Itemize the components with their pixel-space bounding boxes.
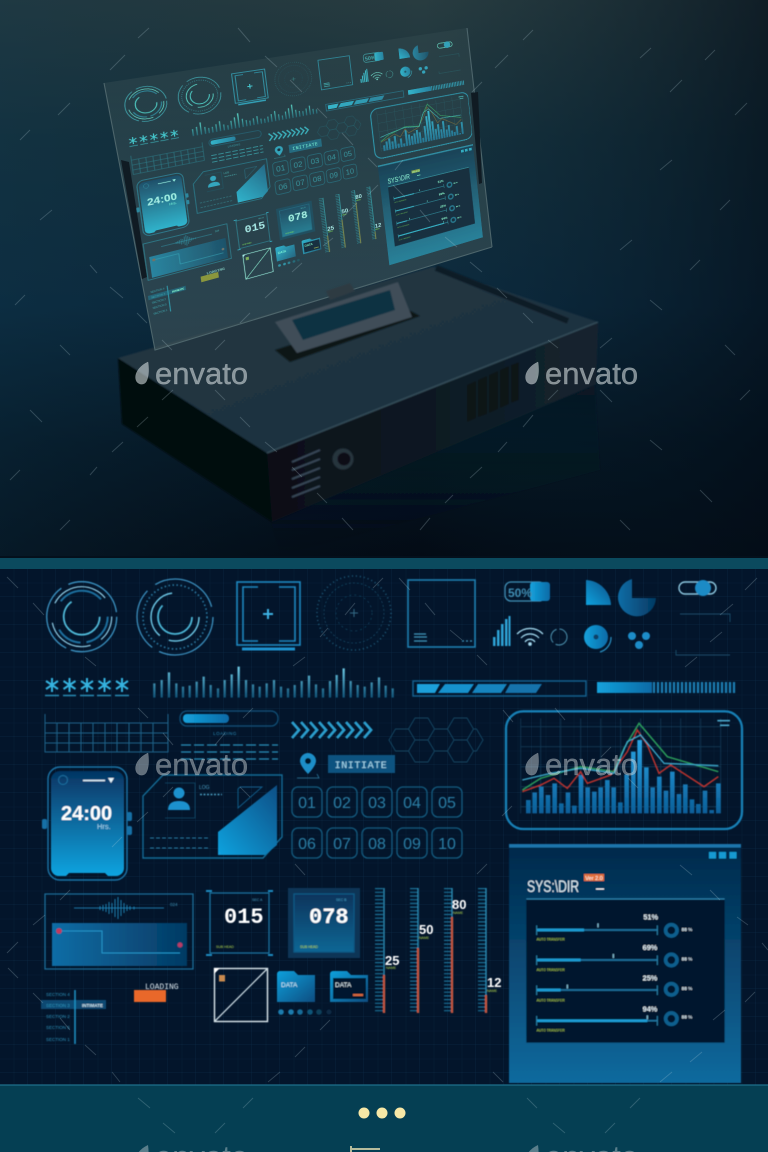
inner data board: 88 % — [682, 927, 693, 932]
counter 078: SEC B — [336, 898, 347, 902]
stand frame — [275, 282, 412, 353]
next icon fragment — [351, 1146, 380, 1152]
watermark middle left: envato — [155, 747, 248, 782]
waveform panel: 024 — [170, 902, 178, 907]
numbered keypad: 04 — [403, 795, 421, 812]
initiate button: INITIATE — [335, 761, 387, 772]
numbered keypad: 01 — [298, 795, 316, 812]
numbered keypad — [292, 787, 462, 858]
device: stand — [275, 282, 420, 362]
numbered keypad: 06 — [298, 836, 316, 853]
panel: interface sheet background — [0, 569, 768, 1085]
initiate button — [328, 755, 395, 773]
striped progress bar — [597, 682, 734, 693]
targeting square — [237, 582, 300, 649]
band: header strip of the interface sheet — [0, 558, 768, 569]
small ring — [551, 629, 567, 645]
inner data board: 69% — [643, 943, 658, 952]
vertical sliders: 25 — [385, 953, 399, 968]
counter 015: SEC A — [252, 898, 263, 902]
panel: footer band — [0, 1085, 768, 1152]
loading tag: LOADING — [145, 983, 179, 992]
inner data board: AUTO TRANSFER — [537, 1029, 565, 1033]
phone widget — [42, 767, 132, 880]
asterisk row — [45, 678, 129, 696]
honeycomb — [389, 718, 483, 762]
watermark middle right: envato — [545, 747, 638, 782]
counter 078: SUB HEAD — [300, 945, 318, 949]
loading pill: LOADING — [213, 731, 237, 736]
sysadir panel — [509, 844, 741, 1083]
numbered keypad: 08 — [368, 836, 386, 853]
radar dial — [317, 576, 391, 650]
disc icon — [584, 625, 611, 652]
inner data board: 25% — [643, 974, 658, 983]
inner data board: AUTO TRANSFER — [537, 938, 565, 942]
version tag: Ver 2.0 — [585, 876, 603, 882]
signal bars — [493, 616, 510, 646]
base left face — [118, 358, 272, 522]
numbered keypad: 05 — [438, 795, 456, 812]
waveform panel — [45, 894, 193, 969]
pie three quarter — [618, 579, 656, 616]
inner data board: 88 % — [682, 1014, 693, 1019]
device: base unit — [118, 267, 600, 556]
version tag — [584, 874, 604, 889]
gauge ring one — [47, 582, 117, 652]
inner data board: 88 % — [682, 957, 693, 962]
segmented progress bar — [413, 681, 586, 696]
equalizer wave — [154, 667, 393, 698]
section menu: SECTION 3 — [46, 1003, 70, 1008]
folder icon data — [277, 971, 315, 1002]
phone widget: 24:00 — [61, 803, 112, 825]
numbered keypad: 10 — [438, 836, 456, 853]
folder icon data dark — [330, 971, 368, 1002]
vertical sliders: NAME — [453, 911, 464, 915]
folder icon data: DATA — [281, 982, 298, 989]
interface elements — [41, 576, 742, 1083]
dashed lines — [181, 745, 278, 759]
toggle switch — [679, 580, 716, 596]
device: glass screen — [104, 28, 492, 350]
pager dots — [278, 1009, 332, 1015]
holographic interface projected on the glass screen — [124, 41, 483, 315]
numbered keypad: 03 — [368, 795, 386, 812]
phone widget: Hrs. — [97, 822, 111, 831]
inner data board: AUTO TRANSFER — [537, 968, 565, 972]
front knob — [332, 448, 354, 470]
base top face — [118, 267, 598, 453]
front slats — [292, 450, 320, 497]
section menu — [41, 990, 106, 1044]
numbered keypad: 07 — [333, 836, 351, 853]
watermark top left: envato — [155, 356, 248, 391]
chevron strip — [292, 722, 371, 738]
section menu: SECTION 1 — [46, 1037, 70, 1042]
vertical sliders: 12 — [487, 975, 501, 990]
profile card — [143, 775, 282, 858]
mesh grid box — [45, 714, 168, 752]
base front face — [267, 322, 598, 522]
panel title: SYS:\DIR — [527, 877, 579, 896]
section menu: SECTION 2 — [46, 1014, 70, 1019]
numbered keypad: 09 — [403, 836, 421, 853]
section menu: SECTION 4 — [46, 992, 70, 997]
inner data board: 51% — [643, 912, 658, 921]
inner data board: 88 % — [682, 986, 693, 991]
pie quarter — [586, 580, 611, 605]
inner data board: 94% — [643, 1004, 658, 1013]
counter 015 — [206, 891, 273, 955]
loading tag — [134, 983, 179, 1002]
vertical sliders: NAME — [386, 966, 397, 970]
vertical sliders — [379, 888, 501, 1013]
rear slot — [436, 268, 568, 321]
loading pill — [180, 711, 278, 736]
frame square — [408, 580, 475, 647]
window buttons — [709, 852, 736, 858]
vertical sliders: NAME — [419, 936, 430, 940]
floor reflection — [270, 385, 600, 556]
three dots icon — [628, 632, 650, 649]
vertical sliders: NAME — [487, 989, 498, 993]
section menu: SECTION 5 — [46, 1025, 70, 1030]
numbered keypad: 02 — [333, 795, 351, 812]
battery widget: 50% — [508, 586, 532, 600]
panel: studio backdrop — [0, 0, 768, 556]
wifi icon — [517, 628, 543, 645]
vertical sliders: 50 — [419, 922, 433, 937]
vertical sliders: 80 — [452, 897, 466, 912]
hinge — [326, 283, 355, 300]
folder icon data dark: DATA — [335, 982, 352, 989]
right dark clip — [471, 92, 482, 184]
base edge highlight — [267, 322, 598, 453]
counter 015: SUB HEAD — [216, 945, 234, 949]
counter 015: 015 — [224, 905, 264, 930]
stand window — [292, 290, 395, 340]
watermark top right: envato — [545, 356, 638, 391]
inner data board — [526, 899, 725, 1043]
crossed square — [214, 968, 268, 1022]
section menu: INTIMATE — [82, 1003, 103, 1008]
gauge ring two — [137, 579, 213, 655]
left dark clip — [121, 160, 147, 279]
counter 078: 078 — [309, 905, 349, 930]
line and bar chart — [506, 711, 742, 829]
screen frame edges — [104, 28, 492, 350]
location pin — [297, 753, 319, 778]
pagination dots — [358, 1108, 406, 1118]
faint corner lines — [676, 614, 730, 655]
battery widget — [505, 582, 550, 601]
profile card: LOG — [199, 785, 210, 791]
inner data board: AUTO TRANSFER — [537, 998, 565, 1002]
counter 078 — [288, 888, 360, 958]
rear side vents — [467, 362, 519, 422]
stand foot — [275, 308, 420, 362]
